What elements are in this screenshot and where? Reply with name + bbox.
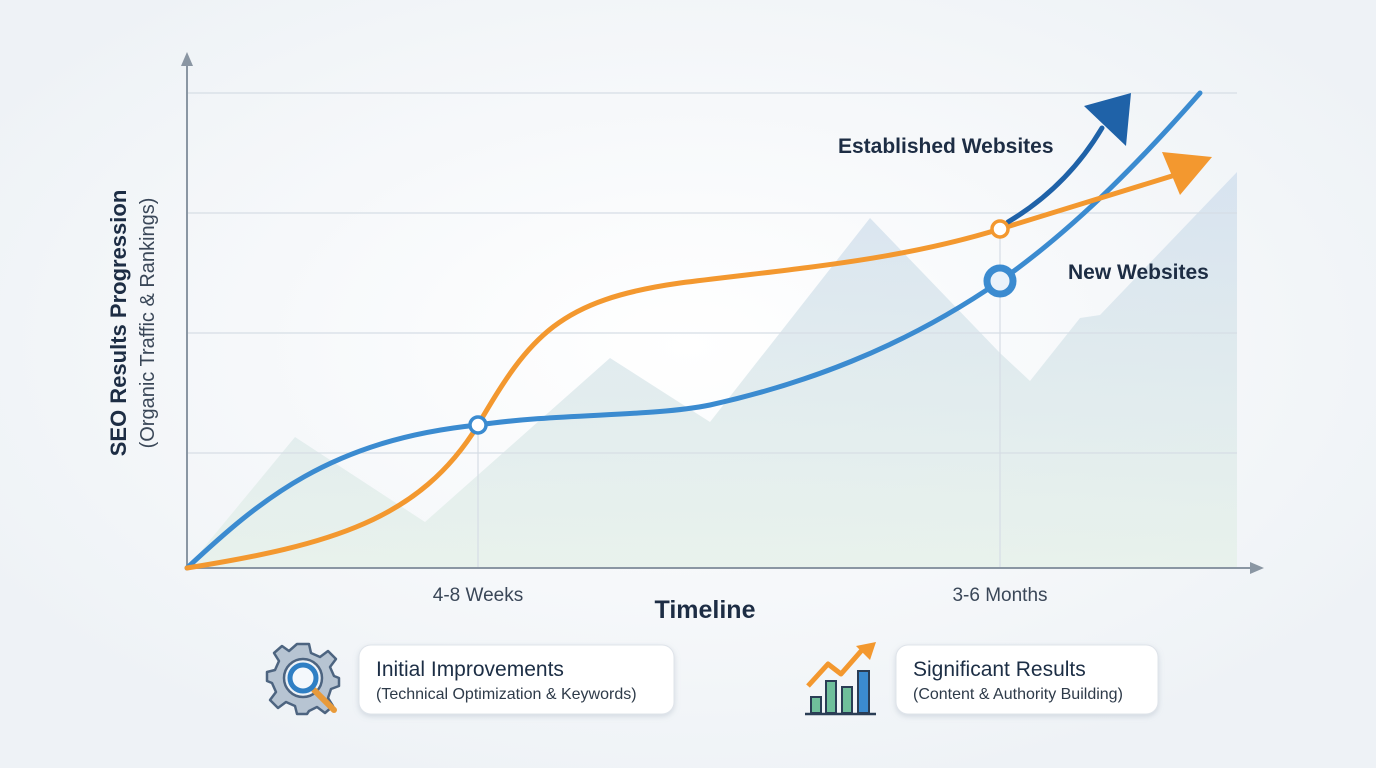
line: new websites (blue)	[187, 93, 1200, 568]
x tick labels: 3-6 Months	[952, 585, 1048, 606]
panel: significant results: (Content & Authority Building)	[913, 686, 1123, 703]
label: established websites: Established Websites	[838, 135, 1054, 158]
panel: significant results: Significant Results	[913, 658, 1086, 681]
panel: initial improvements: Initial Improvements	[376, 658, 564, 681]
x tick labels	[433, 585, 1048, 606]
label: new websites: New Websites	[1068, 261, 1209, 284]
panel: significant results	[896, 645, 1158, 714]
arrow: established growth	[1008, 93, 1131, 222]
axes	[181, 52, 1264, 574]
milestone nodes	[470, 221, 1013, 433]
icon: growth chart	[805, 642, 876, 714]
line: established (orange)	[187, 152, 1212, 568]
panel: initial improvements	[359, 645, 674, 714]
y axis title: SEO Results Progression	[106, 190, 131, 456]
y axis title	[106, 190, 159, 456]
chart	[106, 52, 1264, 624]
icon: gear magnifier	[267, 644, 339, 714]
x tick labels: 4-8 Weeks	[433, 585, 523, 606]
y axis title: (Organic Traffic & Rankings)	[137, 198, 159, 448]
x axis title: Timeline	[655, 596, 756, 624]
background mountains	[187, 172, 1237, 568]
panel: initial improvements: (Technical Optimization & Keywords)	[376, 686, 637, 703]
